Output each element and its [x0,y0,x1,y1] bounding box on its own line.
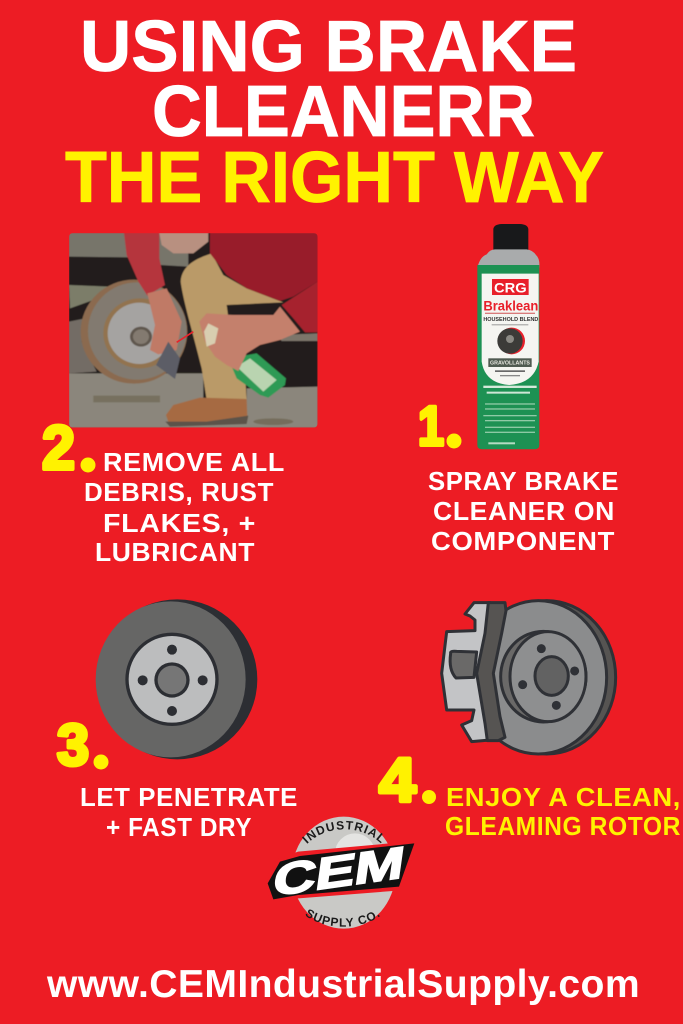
number 4 [379,746,436,815]
logo: CEM Industrial Supply Co.: INDUSTRIAL [302,820,383,844]
number 3 [57,713,108,778]
step 2 text: REMOVE ALL [103,447,285,477]
icon: disc rotor with caliper [442,601,616,754]
spray can: Braklean: HOUSEHOLD BLEND [483,317,538,323]
number 2: 2 [42,414,75,483]
title: THE RIGHT WAY [65,138,604,218]
step 4 text: ENJOY A CLEAN, [446,782,681,812]
photo: mechanic spraying brake rotor [69,233,318,428]
spray can: Braklean: GRAVOLLANTS [490,361,530,367]
title: CLEANERR [152,72,535,152]
logo: CEM Industrial Supply Co.: CEM [270,836,408,906]
title: USING BRAKE [80,7,577,87]
spray can: Braklean: CRG [494,279,527,295]
step 4 text [445,782,681,841]
step 3 text [80,782,298,842]
logo: CEM Industrial Supply Co. [268,816,414,929]
spray can: Braklean [477,224,539,449]
step 3 text: LET PENETRATE [80,782,298,812]
number 1: 1 [418,394,444,457]
logo: CEM Industrial Supply Co.: SUPPLY CO. [306,910,380,927]
spray can: Braklean: Braklean [483,297,538,313]
step 1 text: COMPONENT [431,526,615,556]
icon: brake drum [96,599,257,759]
step 1 text: CLEANER ON [433,496,615,526]
step 2 text [84,447,285,567]
step 1 text [428,466,619,556]
number 2 [42,414,96,483]
step 2 text: DEBRIS, RUST [84,477,274,507]
number 3: 3 [57,713,89,778]
step 1 text: SPRAY BRAKE [428,466,619,496]
title [65,7,604,218]
step 3 text: + FAST DRY [106,812,252,842]
step 2 text: FLAKES, + [103,508,256,538]
website url: www.CEMIndustrialSupply.com [46,963,640,1006]
step 2 text: LUBRICANT [95,537,255,567]
number 4: 4 [379,746,417,815]
